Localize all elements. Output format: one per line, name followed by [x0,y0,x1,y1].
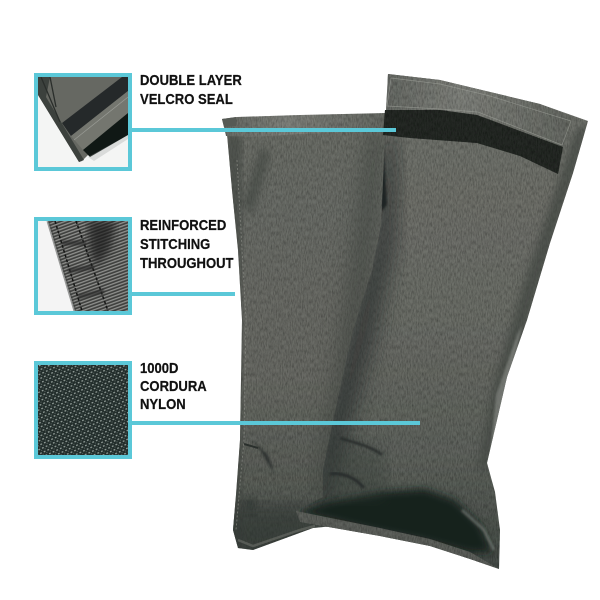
left bag top flap [222,113,388,137]
velcro dark strip [383,110,563,174]
label: REINFORCED [140,217,226,234]
label [140,72,242,108]
label: VELCRO SEAL [140,91,233,108]
callout: reinforced stitching [34,217,235,315]
inset photo: nylon weave [34,361,132,459]
label [140,360,207,413]
left bag panel [222,113,392,560]
inset photo: velcro seal [34,73,132,171]
label: DOUBLE LAYER [140,72,242,89]
label: STITCHING [140,236,210,253]
callout: double layer velcro seal [34,72,396,171]
label: 1000D [140,360,178,377]
callout: 1000D cordura nylon [34,360,420,459]
connector line to stitching [132,292,235,296]
label [140,217,234,272]
inset photo: stitching [34,217,132,315]
velcro backing strip [386,74,573,147]
connector line to velcro [132,128,396,132]
connector line to fabric [132,421,420,425]
label: CORDURA [140,378,207,395]
label: THROUGHOUT [140,255,234,272]
sandbag product photo [222,74,588,569]
right bag panel [296,74,590,569]
label: NYLON [140,396,186,413]
